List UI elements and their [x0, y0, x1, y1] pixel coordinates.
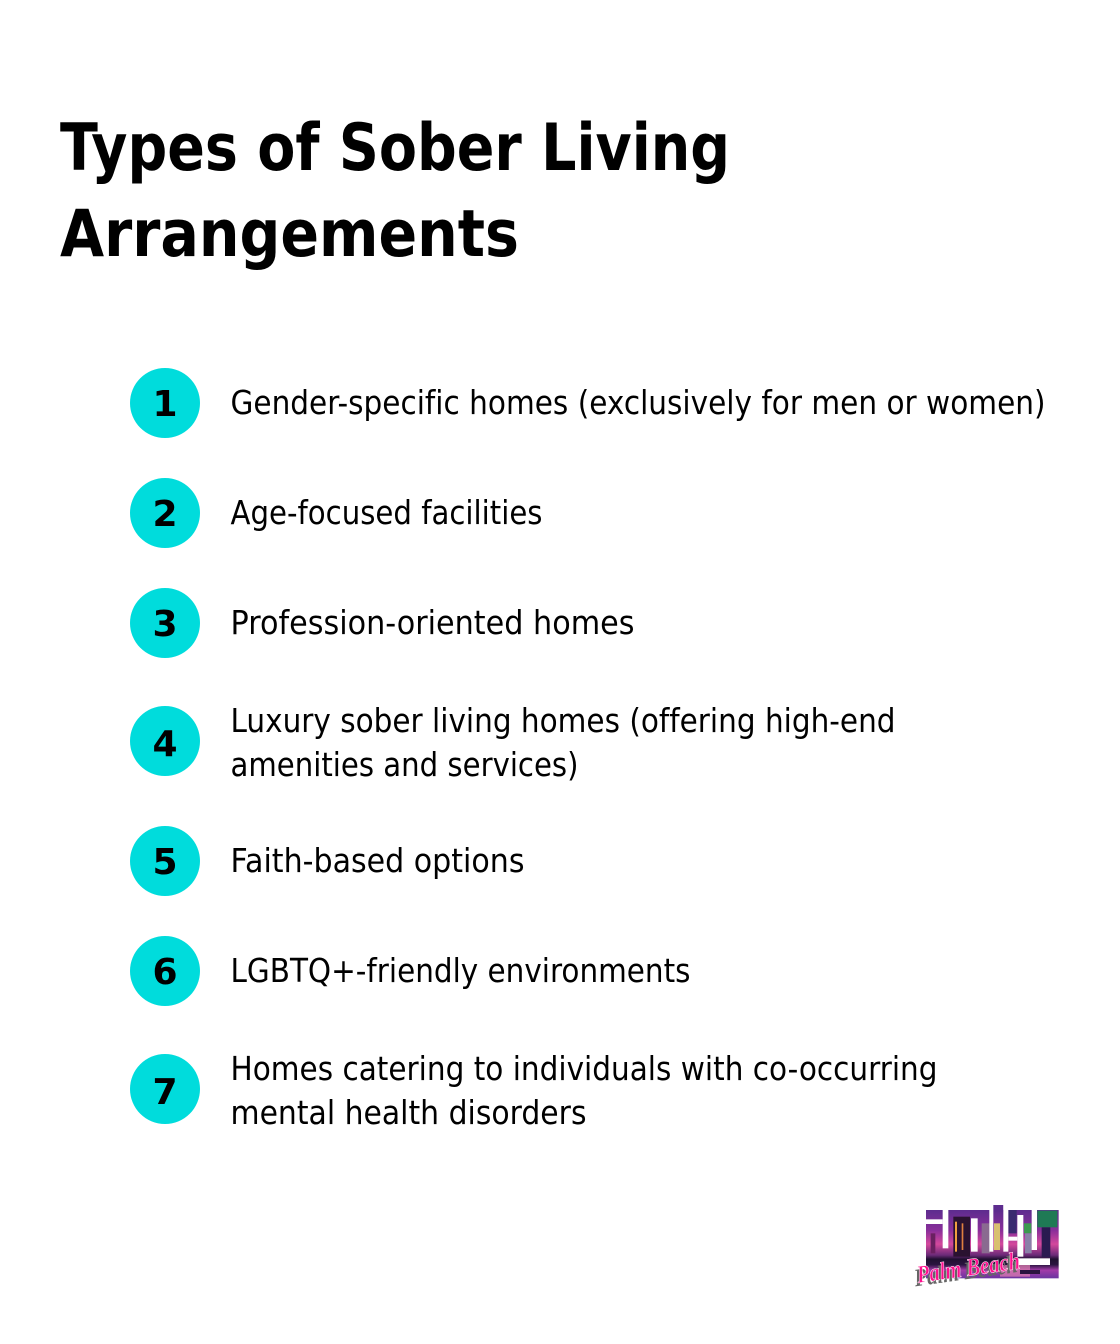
- list item 4: Luxury sober living homes (offering high-end: [230, 701, 896, 740]
- list item 2: [130, 478, 542, 548]
- list item 4: amenities and services): [230, 745, 578, 784]
- list item 6: 6: [152, 952, 178, 993]
- list item 6: [130, 936, 690, 1006]
- list item 3: 3: [152, 604, 178, 645]
- logo script text: Palm Beach: [914, 1248, 1022, 1289]
- list item 3: [130, 588, 634, 658]
- list item 5: Faith-based options: [230, 841, 524, 880]
- list item 4: 4: [152, 724, 178, 765]
- logo: Amity Palm Beach: [911, 1205, 1059, 1292]
- list item 2: 2: [152, 494, 178, 535]
- list item 4: [130, 701, 896, 784]
- title: [60, 111, 730, 272]
- list item 1: Gender-specific homes (exclusively for men or women): [230, 383, 1046, 422]
- list item 7: 7: [152, 1072, 178, 1113]
- list item 7: Homes catering to individuals with co-occurring: [230, 1049, 938, 1088]
- list item 2: Age-focused facilities: [230, 493, 542, 532]
- logo script text: Palm Beach: [912, 1251, 1019, 1292]
- title: Arrangements: [60, 197, 519, 272]
- list item 6: LGBTQ+-friendly environments: [230, 951, 690, 990]
- list item 1: 1: [152, 384, 178, 425]
- logo letterform gaps: [926, 1205, 1058, 1265]
- list item 1: [130, 368, 1046, 438]
- list item 5: 5: [152, 842, 178, 883]
- title: Types of Sober Living: [60, 111, 730, 186]
- list item 7: [130, 1049, 938, 1132]
- list item 5: [130, 826, 524, 896]
- list item 3: Profession-oriented homes: [230, 603, 634, 642]
- list item 7: mental health disorders: [230, 1093, 586, 1132]
